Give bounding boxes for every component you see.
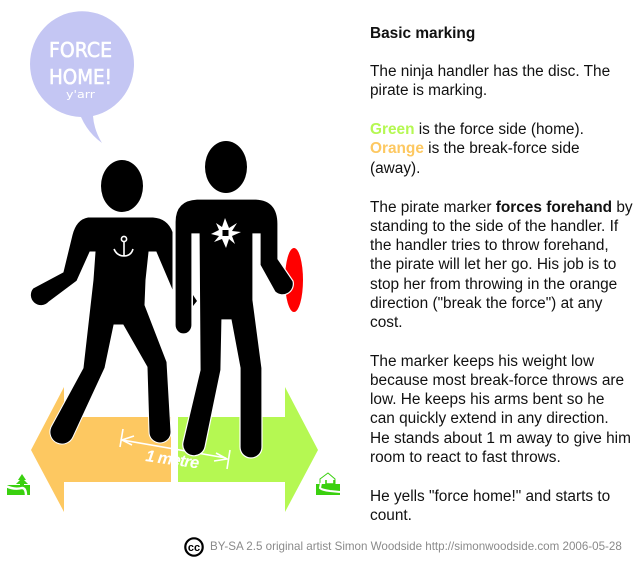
- paragraph: forcing forehand: the handler tries to throw forehand,: [370, 237, 609, 254]
- distance marker: 1 metre: 1 metre: [144, 447, 200, 472]
- paragraph: colour key: Green is the force side (home).: [370, 121, 584, 138]
- disc: [285, 248, 303, 312]
- paragraph: stance: [370, 352, 631, 466]
- icon: ninja star: [211, 218, 241, 248]
- paragraph: forcing forehand: stop her from throwing in the orange: [370, 276, 617, 293]
- paragraph: stance: The marker keeps his weight low: [370, 352, 594, 370]
- figure: pirate marker: [30, 160, 173, 444]
- icon: house and river, home: [316, 473, 340, 495]
- paragraph: colour key: (away).: [370, 160, 420, 177]
- paragraph: roles: [370, 63, 610, 99]
- paragraph: stance: can quickly extend in any direction.: [370, 410, 609, 427]
- ninja head: [205, 141, 247, 193]
- icon: creative commons: cc: [188, 542, 200, 554]
- speech bubble: force home: HOME!: [49, 65, 112, 89]
- paragraph: roles: The ninja handler has the disc. The: [370, 63, 610, 80]
- credit line: [184, 537, 622, 557]
- icon: anchor: [114, 236, 133, 256]
- arrow: orange break-force side: [31, 387, 171, 512]
- paragraph: forcing forehand: [370, 198, 633, 331]
- paragraph: forcing forehand: The pirate marker forces forehand by: [370, 198, 633, 216]
- paragraph: stance: He stands about 1 m away to give him: [370, 430, 631, 447]
- arrow: green force side: [178, 387, 318, 512]
- speech bubble: force home: [30, 11, 134, 143]
- paragraph: stance: room to react to fast throws.: [370, 449, 561, 466]
- pirate body: [30, 217, 173, 444]
- speech bubble: force home: y'arr: [66, 88, 96, 101]
- figure: ninja handler: [175, 141, 293, 458]
- paragraph: stance: low. He keeps his arms bent so he: [370, 391, 604, 408]
- ninja body: [175, 199, 293, 458]
- small hidden disc edge: [193, 295, 197, 306]
- pirate head: [101, 160, 143, 212]
- paragraph: the call: count.: [370, 507, 412, 524]
- heading: Basic marking: [370, 25, 475, 42]
- paragraph: colour key: [370, 121, 584, 177]
- speech bubble: force home: FORCE: [49, 38, 112, 62]
- distance marker: 1 metre: [120, 429, 230, 472]
- paragraph: forcing forehand: direction ("break the force") at any: [370, 295, 602, 312]
- paragraph: the call: He yells "force home!" and starts to: [370, 488, 610, 505]
- paragraph: forcing forehand: standing to the side of the handler. If: [370, 218, 618, 235]
- paragraph: stance: because most break-force throws are: [370, 372, 624, 389]
- paragraph: the call: [370, 488, 610, 524]
- icon: tree and river, away: [6, 474, 30, 496]
- illustration: marking scene: [7, 11, 340, 512]
- paragraph: roles: pirate is marking.: [370, 82, 487, 99]
- text column: basic marking explanation: [370, 25, 633, 524]
- licence text: BY-SA 2.5 original artist Simon Woodside http://simonwoodside.com 2006-05-28: [210, 540, 622, 553]
- paragraph: forcing forehand: the pirate will let her go. His job is to: [370, 256, 616, 273]
- icon: creative commons: [184, 537, 204, 557]
- paragraph: colour key: Orange is the break-force side: [370, 140, 580, 157]
- paragraph: forcing forehand: cost.: [370, 314, 403, 331]
